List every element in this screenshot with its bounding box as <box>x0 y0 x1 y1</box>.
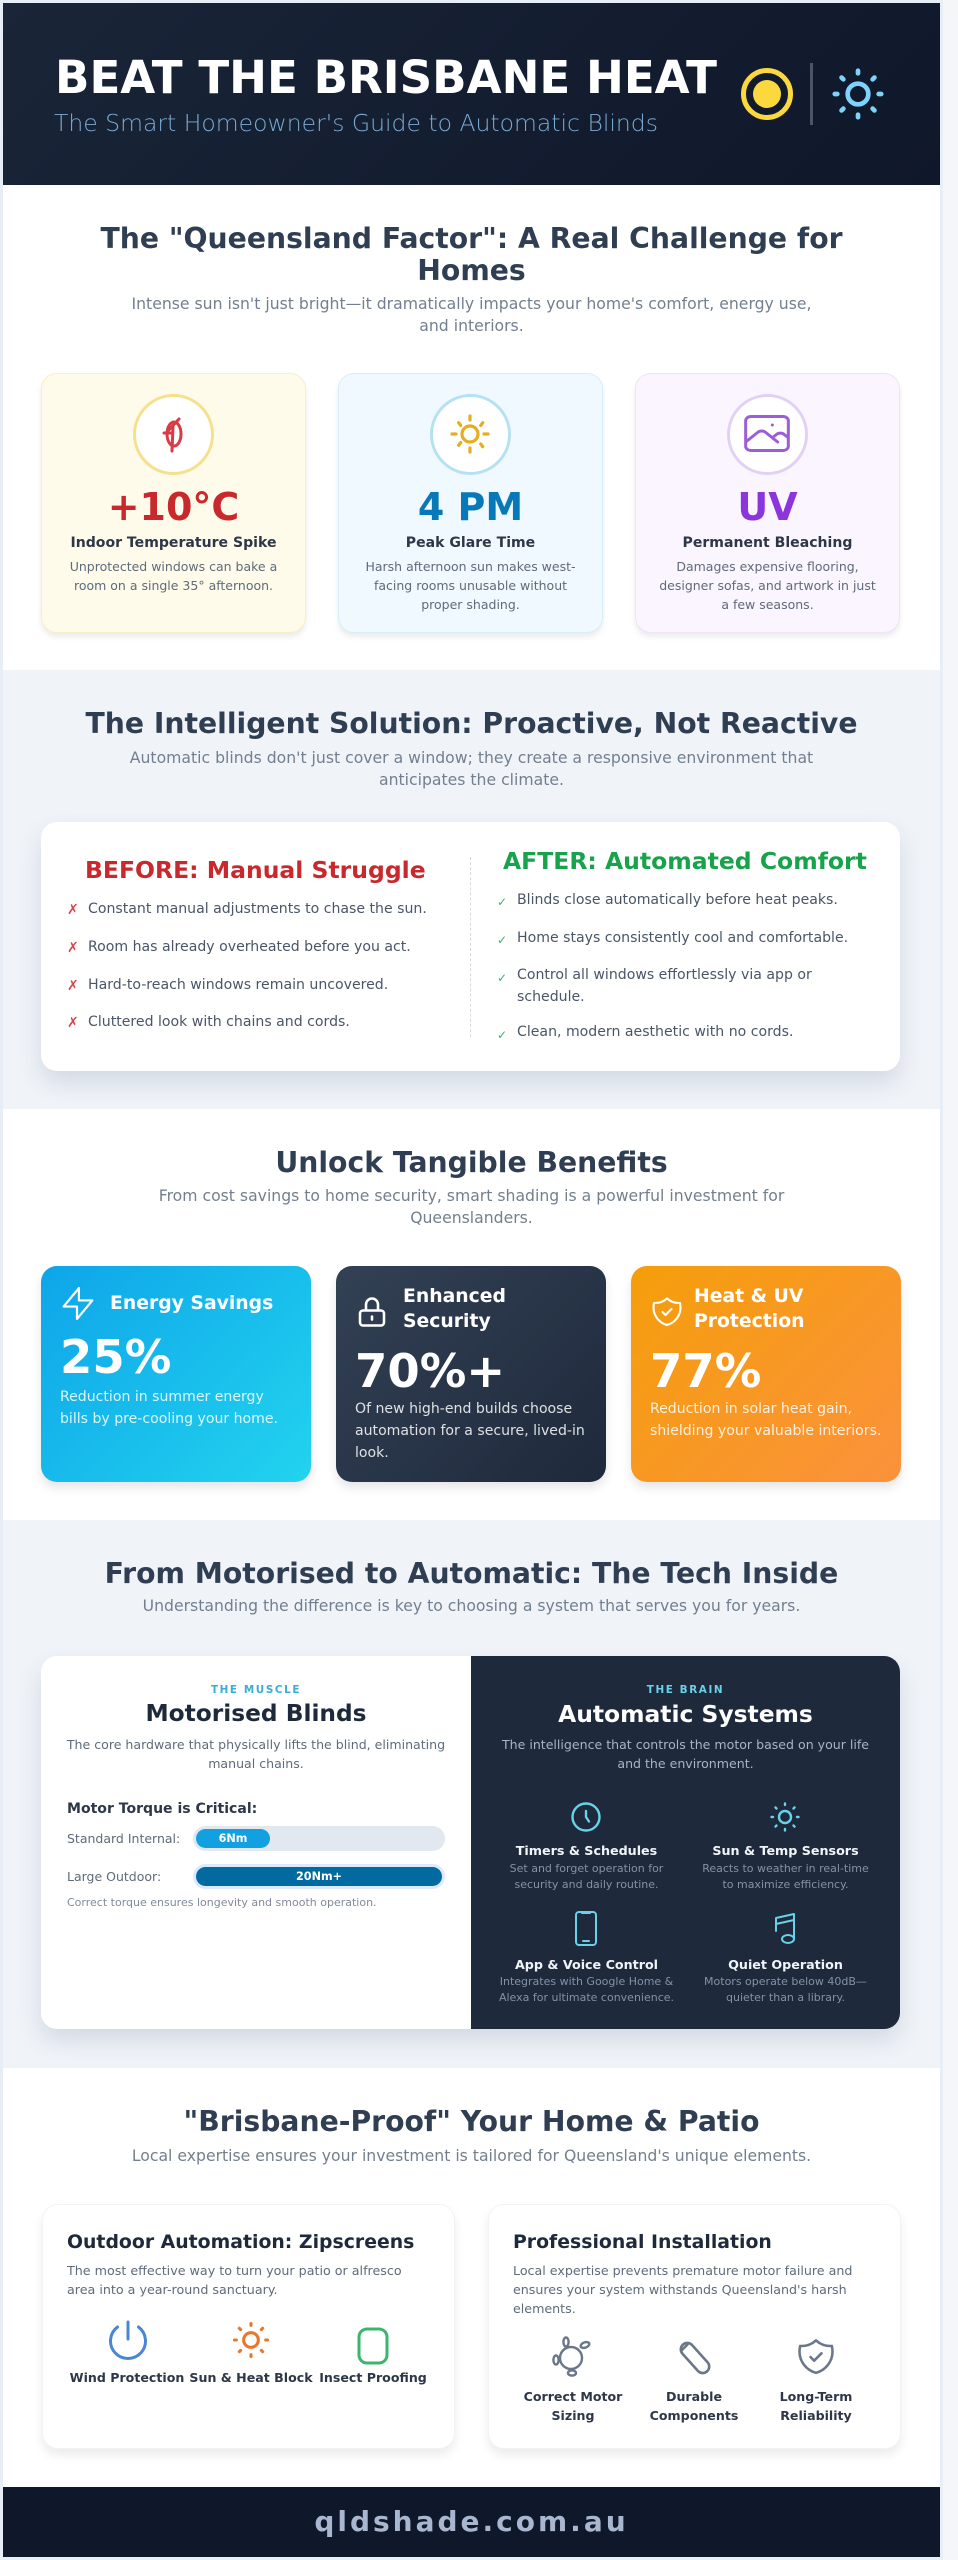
card text: a few seasons. <box>721 597 814 612</box>
chart note: Correct torque ensures longevity and smooth operation. <box>67 1896 377 1909</box>
icon: insect screen <box>358 2328 388 2364</box>
card title: Peak Glare Time <box>406 535 535 551</box>
feature: timers: Set and forget operation for <box>510 1862 663 1875</box>
icon: shield check <box>652 1297 682 1326</box>
card title: Outdoor Automation: Zipscreens <box>67 2232 414 2253</box>
column text <box>66 1737 445 1771</box>
feature: sensors: Sun & Temp Sensors <box>712 1843 859 1858</box>
card text: room on a single 35° afternoon. <box>74 578 273 593</box>
card title: Professional Installation <box>513 2232 772 2253</box>
before heading: BEFORE: Manual Struggle <box>85 856 426 884</box>
card title: Permanent Bleaching <box>683 535 852 551</box>
footer url: qldshade.com.au <box>314 2505 629 2538</box>
panel: intelligent solution section <box>3 670 940 1109</box>
divider <box>470 857 471 1037</box>
panel: brisbane-proof section <box>3 2068 940 2487</box>
card: professional installation <box>488 2204 901 2449</box>
text: queensland intro <box>132 294 811 335</box>
panel: motorised vs automatic <box>41 1656 900 2029</box>
feature: app control: App & Voice Control <box>515 1957 658 1972</box>
card text: Local expertise prevents premature motor failure and <box>513 2263 852 2278</box>
icon: sun <box>430 394 511 475</box>
text: benefits intro: From cost savings to home security, smart shading is a powerful investment for <box>159 1186 784 1205</box>
footer <box>3 2487 940 2557</box>
card title: Indoor Temperature Spike <box>70 535 277 551</box>
label: Long-Term <box>780 2389 852 2404</box>
column title: Motorised Blinds <box>145 1700 367 1727</box>
text: queensland intro: Intense sun isn't just bright—it dramatically impacts your home's comfort, energy use, <box>132 294 811 313</box>
icon: phone <box>575 1911 597 1946</box>
text: solution intro: Automatic blinds don't just cover a window; they create a responsive environment that <box>130 748 813 767</box>
bar chart: torque: 20Nm+ <box>296 1870 342 1883</box>
column text: The intelligence that controls the motor based on your life <box>502 1737 869 1752</box>
panel: benefits section <box>3 1109 940 1520</box>
text: benefits intro: Queenslanders. <box>410 1208 533 1227</box>
card text <box>60 1389 278 1427</box>
heading: tech inside: From Motorised to Automatic: The Tech Inside <box>105 1557 838 1590</box>
card text: Unprotected windows can bake a <box>70 559 277 574</box>
column text: manual chains. <box>208 1756 304 1771</box>
heading: queensland factor: The "Queensland Factor": A Real Challenge for <box>100 222 843 255</box>
after list: schedule. <box>517 989 585 1005</box>
card text <box>650 1401 881 1439</box>
heading: queensland factor: Homes <box>417 254 526 287</box>
label: Durable <box>666 2389 722 2404</box>
stat value: +10°C <box>108 485 239 529</box>
bar chart: torque: Standard Internal: <box>67 1831 180 1846</box>
before list: Constant manual adjustments to chase the sun. <box>88 901 427 917</box>
before list: Cluttered look with chains and cords. <box>88 1014 350 1030</box>
card title <box>403 1286 506 1332</box>
feature: sensors <box>702 1802 869 1891</box>
text: tech intro: Understanding the difference is key to choosing a system that serves you for years. <box>143 1596 800 1615</box>
label: Components <box>650 2408 738 2423</box>
icon: sun sensor <box>770 1802 800 1832</box>
card text: The most effective way to turn your patio or alfresco <box>67 2263 402 2278</box>
bar chart: torque: 6Nm <box>219 1832 247 1845</box>
after list: Blinds close automatically before heat peaks. <box>517 892 838 908</box>
card text: Harsh afternoon sun makes west- <box>365 559 576 574</box>
before list: ✗ <box>67 978 79 994</box>
heading: benefits: Unlock Tangible Benefits <box>275 1146 668 1179</box>
before list <box>67 901 427 1031</box>
right column: automatic systems <box>471 1656 900 2029</box>
after list: ✓ <box>497 933 507 947</box>
label <box>746 2387 886 2425</box>
after list <box>497 892 848 1042</box>
card text: automation for a secure, lived-in <box>355 1423 585 1439</box>
feature: sensors: Reacts to weather in real-time <box>702 1862 869 1875</box>
heading: intelligent solution: The Intelligent Solution: Proactive, Not Reactive <box>86 707 858 740</box>
card text <box>365 559 576 612</box>
text: benefits intro <box>159 1186 784 1227</box>
icon: power <box>109 2320 147 2360</box>
after heading: AFTER: Automated Comfort <box>503 847 867 875</box>
card text: proper shading. <box>421 597 520 612</box>
card text: bills by pre-cooling your home. <box>60 1411 278 1427</box>
before list: Hard-to-reach windows remain uncovered. <box>88 977 388 993</box>
text: solution intro <box>130 748 813 789</box>
card title <box>694 1286 804 1332</box>
card title: Enhanced <box>403 1286 506 1307</box>
panel: before and after comparison <box>41 822 900 1071</box>
panel: queensland factor section <box>3 185 940 670</box>
stat value: 77% <box>650 1344 761 1398</box>
card title: Security <box>403 1311 491 1332</box>
card text: look. <box>355 1445 389 1461</box>
stat value: 70%+ <box>355 1344 505 1398</box>
label <box>524 2389 622 2423</box>
divider bar <box>810 63 813 125</box>
card text <box>355 1401 585 1461</box>
icon: wrench <box>680 2342 710 2374</box>
after list: Control all windows effortlessly via app or <box>517 967 812 983</box>
feature: timers <box>510 1802 664 1891</box>
card text: Reduction in solar heat gain, <box>650 1401 852 1417</box>
eyebrow: THE MUSCLE <box>211 1684 301 1696</box>
label: Reliability <box>780 2408 852 2423</box>
text: brisbane intro: Local expertise ensures your investment is tailored for Queensland's unique elements. <box>132 2146 811 2165</box>
before list: Room has already overheated before you act. <box>88 939 411 955</box>
card title: Protection <box>694 1311 804 1332</box>
card title: Energy Savings <box>110 1293 273 1314</box>
feature: timers: Timers & Schedules <box>516 1843 657 1858</box>
before list: ✗ <box>67 1015 79 1031</box>
feature: timers: security and daily routine. <box>514 1878 659 1891</box>
column text <box>502 1737 869 1771</box>
card text: designer sofas, and artwork in just <box>659 578 876 593</box>
feature: quiet operation <box>704 1913 867 2004</box>
subtitle: The Smart Homeowner's Guide to Automatic Blinds <box>54 109 658 137</box>
card text <box>70 559 277 593</box>
icon: lightning <box>62 1287 94 1320</box>
after list: ✓ <box>497 1028 507 1042</box>
column text: The core hardware that physically lifts the blind, eliminating <box>67 1737 445 1752</box>
feature: app control: Integrates with Google Home & <box>500 1975 673 1988</box>
card: indoor temperature <box>41 373 306 633</box>
icon: motor cog <box>552 2336 590 2377</box>
label: Sizing <box>551 2408 594 2423</box>
feature: app control: Alexa for ultimate convenience. <box>499 1991 674 2004</box>
card: energy savings <box>41 1266 311 1482</box>
header banner <box>3 3 940 185</box>
card text: shielding your valuable interiors. <box>650 1423 881 1439</box>
feature: quiet operation: Quiet Operation <box>728 1957 843 1972</box>
feature: quiet operation: quieter than a library. <box>726 1991 845 2004</box>
label: Insect Proofing <box>319 2370 427 2385</box>
icon: shield <box>794 2335 838 2379</box>
torque heading: Motor Torque is Critical: <box>67 1801 257 1817</box>
icon: padlock <box>358 1297 386 1327</box>
label: Sun & Heat Block <box>189 2370 313 2385</box>
card text <box>513 2263 852 2316</box>
card: peak glare <box>338 373 603 633</box>
title: BEAT THE BRISBANE HEAT <box>55 51 717 104</box>
card text: Damages expensive flooring, <box>676 559 859 574</box>
stat value: 25% <box>60 1330 171 1384</box>
card: enhanced security <box>336 1266 606 1482</box>
icon: clock <box>571 1802 601 1832</box>
column title: Automatic Systems <box>558 1700 813 1728</box>
feature: app control <box>499 1911 674 2004</box>
label <box>650 2389 738 2423</box>
card text: Of new high-end builds choose <box>355 1401 572 1417</box>
heading: queensland factor <box>100 222 843 287</box>
card title: Heat & UV <box>694 1286 803 1307</box>
after list: ✓ <box>497 971 507 985</box>
card text <box>659 559 876 612</box>
eyebrow: THE BRAIN <box>647 1684 724 1696</box>
heading: brisbane-proof: "Brisbane-Proof" Your Home & Patio <box>184 2105 759 2138</box>
icon: thermometer <box>133 394 214 475</box>
label: Correct Motor <box>524 2389 622 2404</box>
card text: elements. <box>513 2301 576 2316</box>
bar chart: torque <box>67 1826 445 1889</box>
left column: motorised blinds <box>66 1684 445 1909</box>
card text: Reduction in summer energy <box>60 1389 264 1405</box>
card text: area into a year-round sanctuary. <box>67 2282 278 2297</box>
text: queensland intro: and interiors. <box>419 316 524 335</box>
feature: quiet operation: Motors operate below 40dB— <box>704 1975 867 1988</box>
label: Wind Protection <box>70 2370 184 2385</box>
icon: yellow sun disc <box>741 68 793 120</box>
panel: tech section <box>3 1520 940 2068</box>
card text: facing rooms unusable without <box>374 578 567 593</box>
card text: ensures your system withstands Queensland's harsh <box>513 2282 847 2297</box>
after list: Home stays consistently cool and comfortable. <box>517 930 848 946</box>
after list: ✓ <box>497 895 507 909</box>
card: permanent bleaching <box>635 373 900 633</box>
icon: sun block <box>232 2322 269 2358</box>
after list: Clean, modern aesthetic with no cords. <box>517 1024 793 1040</box>
icon: picture frame <box>727 394 808 475</box>
card text <box>66 2263 402 2297</box>
text: solution intro: anticipates the climate. <box>379 770 564 789</box>
card: heat and UV protection <box>631 1266 901 1482</box>
before list: ✗ <box>67 902 79 918</box>
stat value: UV <box>737 485 798 529</box>
column text: and the environment. <box>617 1756 754 1771</box>
card: outdoor automation <box>42 2204 455 2449</box>
bar chart: torque: Large Outdoor: <box>67 1869 161 1884</box>
stat value: 4 PM <box>418 485 523 529</box>
icon: music note <box>775 1913 795 1944</box>
feature: sensors: to maximize efficiency. <box>722 1878 849 1891</box>
before list: ✗ <box>67 940 79 956</box>
icon: blue sun outline <box>832 68 884 120</box>
